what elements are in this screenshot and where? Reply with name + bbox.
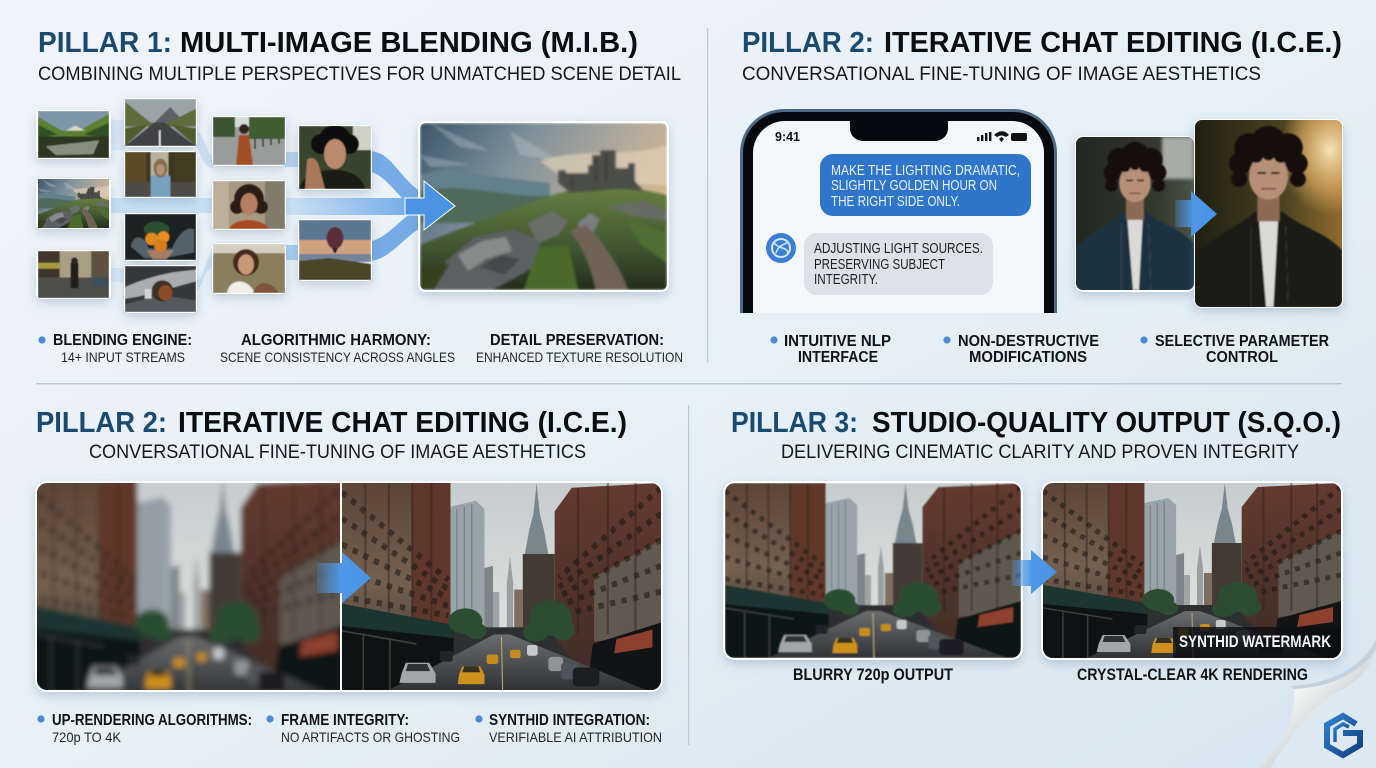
arrow: blurred to sharp (317, 552, 371, 603)
bullet: frame integrity: NO ARTIFACTS OR GHOSTING (281, 729, 460, 745)
bullet: frame integrity: FRAME INTEGRITY: (281, 712, 409, 729)
heading: Pillar 1: PILLAR 1: (38, 27, 172, 59)
bullet: detail preservation: ENHANCED TEXTURE RESOLUTION (476, 349, 683, 365)
caption: crystal clear: CRYSTAL-CLEAR 4K RENDERING (1077, 666, 1308, 684)
panel: Pillar 1 multi-image blending (36, 27, 683, 365)
bullet: selective parameter control (1140, 333, 1329, 366)
bullet: blending engine: BLENDING ENGINE: (53, 332, 192, 349)
heading: Pillar 3: PILLAR 3: (731, 407, 858, 439)
phone mockup (740, 109, 1057, 313)
thumbnail: woman on tree-lined path (212, 116, 286, 166)
heading: Pillar 2 repeat: ITERATIVE CHAT EDITING (I.C.E.) (178, 407, 627, 439)
bullet: frame integrity (266, 712, 460, 745)
page curl (1258, 640, 1376, 768)
arrow: blurry to sharp (1012, 550, 1057, 594)
subheading: Pillar 3: DELIVERING CINEMATIC CLARITY AND PROVEN INTEGRITY (781, 442, 1299, 463)
panel: Pillar 2 iterative chat editing (top) (740, 31, 1347, 362)
phone status icons (977, 131, 1027, 142)
chat bubble: assistant reply: INTEGRITY. (814, 271, 878, 288)
chat bubble: user prompt (820, 154, 1031, 216)
bullet: non-destructive modifications: MODIFICATIONS (969, 349, 1087, 366)
thumbnail: hot-air balloon (298, 219, 372, 281)
bullet: blending engine (38, 332, 192, 365)
logo (1327, 716, 1360, 755)
watermark label (1173, 627, 1341, 658)
subheading: Pillar 1: COMBINING MULTIPLE PERSPECTIVES FOR UNMATCHED SCENE DETAIL (38, 64, 681, 85)
arrow: before to after (1175, 191, 1217, 237)
heading: Pillar 2: ITERATIVE CHAT EDITING (I.C.E.) (884, 27, 1342, 59)
thumbnail: mountain road (124, 98, 197, 147)
bullet: selective parameter control: CONTROL (1206, 349, 1278, 366)
bullet: algorithmic harmony: ALGORITHMIC HARMONY: (241, 332, 431, 349)
bullet: blending engine: 14+ INPUT STREAMS (61, 349, 185, 365)
thumbnail: rocky surf (124, 265, 197, 313)
comparison image: blurred vs sharp street (30, 478, 663, 695)
thumbnail: city walker (36, 250, 111, 299)
composite landscape image (418, 121, 669, 292)
phone clock: 9:41 (775, 129, 800, 144)
icon: assistant avatar (766, 233, 796, 263)
flow bands converging into arrow (110, 120, 424, 292)
heading: Pillar 2: PILLAR 2: (742, 27, 874, 59)
heading: Pillar 2 repeat: PILLAR 2: (36, 407, 167, 439)
bullet: up-rendering: UP-RENDERING ALGORITHMS: (52, 712, 252, 729)
bullet: intuitive NLP interface (770, 333, 891, 366)
image: sharp street with watermark (1041, 481, 1343, 660)
chat bubble: assistant reply (804, 233, 993, 295)
thumbnail: smiling woman with curly hair (212, 180, 286, 230)
bullet: detail preservation (476, 332, 683, 365)
heading: Pillar 1: MULTI-IMAGE BLENDING (M.I.B.) (180, 27, 638, 59)
bullet: non-destructive modifications: NON-DESTRUCTIVE (958, 333, 1099, 350)
image: blurry street (723, 481, 1023, 660)
bullet: intuitive NLP interface: INTERFACE (798, 349, 878, 366)
image: before portrait (1075, 136, 1195, 292)
bullet: algorithmic harmony (220, 332, 455, 365)
thumbnail: castle hillside (36, 178, 111, 229)
arrow: converge to composite (405, 181, 455, 230)
bullet: up-rendering (37, 712, 252, 745)
thumbnail: curly-haired man (298, 125, 372, 190)
watermark label: SYNTHID WATERMARK (1179, 632, 1332, 651)
bullet: detail preservation: DETAIL PRESERVATION: (490, 332, 664, 349)
bullet: selective parameter control: SELECTIVE PARAMETER (1155, 333, 1329, 350)
thumbnail: woman in forest (124, 151, 197, 198)
thumbnail: lake valley (36, 110, 111, 159)
heading: Pillar 3: STUDIO-QUALITY OUTPUT (S.Q.O.) (872, 407, 1341, 439)
chat bubble: assistant reply: ADJUSTING LIGHT SOURCES. (814, 240, 983, 257)
subheading: Pillar 2: CONVERSATIONAL FINE-TUNING OF IMAGE AESTHETICS (742, 64, 1261, 85)
chat bubble: user prompt: SLIGHTLY GOLDEN HOUR ON (831, 177, 997, 194)
bullet: algorithmic harmony: SCENE CONSISTENCY ACROSS ANGLES (220, 349, 455, 365)
phone notch (850, 119, 948, 141)
panel: Pillar 2 repeated (bottom left) (30, 407, 663, 745)
bullet: synthid integration: VERIFIABLE AI ATTRIBUTION (489, 729, 662, 745)
chat bubble: assistant reply: PRESERVING SUBJECT (814, 256, 945, 273)
bullet: synthid integration: SYNTHID INTEGRATION: (489, 712, 650, 729)
panel: Pillar 3 studio-quality output (723, 407, 1343, 684)
chat bubble: user prompt: MAKE THE LIGHTING DRAMATIC, (831, 162, 1020, 179)
image: after portrait (1189, 119, 1347, 316)
subheading: Pillar 2 repeat: CONVERSATIONAL FINE-TUNING OF IMAGE AESTHETICS (89, 442, 586, 463)
bullet: non-destructive modifications (943, 333, 1099, 366)
thumbnail: laughing woman (212, 243, 286, 294)
caption: blurry: BLURRY 720p OUTPUT (793, 666, 953, 684)
chat bubble: user prompt: THE RIGHT SIDE ONLY. (831, 193, 960, 210)
bullet: intuitive NLP interface: INTUITIVE NLP (784, 333, 891, 350)
bullet: up-rendering: 720p TO 4K (52, 729, 122, 745)
thumbnail: oranges in hands (124, 213, 197, 261)
bullet: synthid integration (475, 712, 662, 745)
